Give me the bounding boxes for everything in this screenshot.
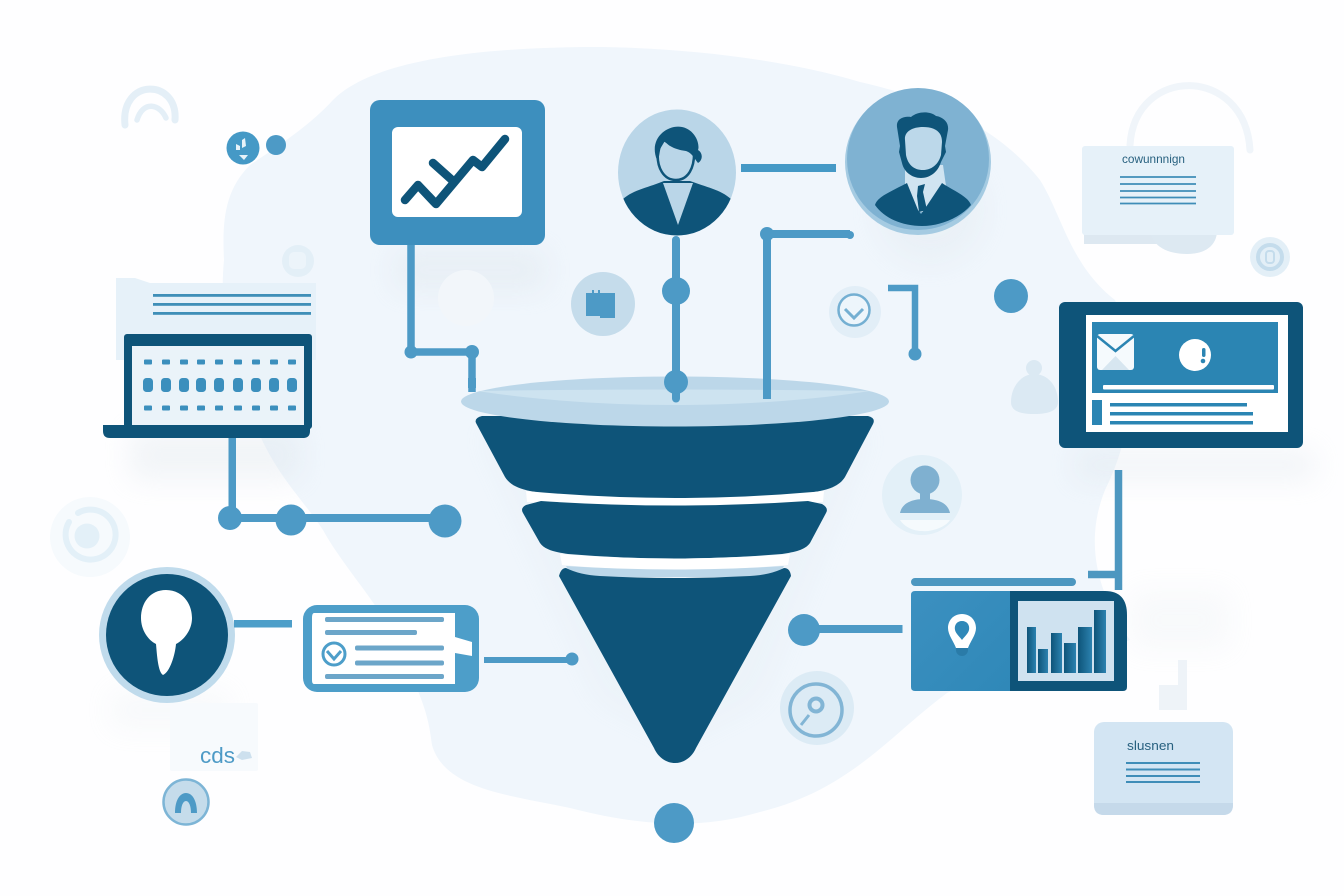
panel: analytics card bbox=[911, 578, 1127, 691]
chart trend line bbox=[405, 139, 505, 204]
faint bracket icon bbox=[1159, 660, 1187, 710]
checklist lines bbox=[325, 617, 444, 679]
paper lines bbox=[153, 294, 311, 315]
connector: checklist to dot bbox=[484, 652, 578, 666]
connector: L to funnel bbox=[760, 227, 854, 399]
cds label: cds bbox=[200, 743, 235, 768]
connector stubs over rim bbox=[468, 370, 771, 402]
node dot right bbox=[994, 279, 1028, 313]
panel: checklist card bbox=[303, 605, 479, 692]
white gap 2 bbox=[560, 554, 790, 570]
decorative arc icon top left bbox=[125, 89, 175, 125]
icon: small at-badge bbox=[1250, 237, 1290, 277]
funnel tier 2 bbox=[522, 501, 827, 558]
keyboard dots bbox=[143, 360, 297, 410]
card: summary note bbox=[1094, 722, 1233, 815]
connector: laptop to nodes bbox=[218, 438, 462, 538]
person: man bbox=[845, 88, 991, 235]
paper back bbox=[116, 278, 316, 360]
faint circle bbox=[438, 270, 494, 326]
panel: email monitor bbox=[1059, 302, 1303, 448]
laptop bbox=[124, 334, 312, 429]
panel: funnel bbox=[461, 376, 889, 763]
icon: envelope bbox=[1097, 334, 1134, 370]
connector: node to analytics card bbox=[788, 614, 902, 646]
bar chart bbox=[1027, 610, 1106, 673]
background blob bbox=[223, 47, 1131, 824]
funnel rim bbox=[461, 376, 889, 426]
icon: thumbs badge bbox=[226, 132, 260, 164]
faint speech badge bbox=[282, 245, 314, 277]
icon: location bulb bbox=[948, 614, 976, 656]
card: campaign note bbox=[1082, 146, 1234, 254]
bottom node dot bbox=[654, 803, 694, 843]
white gap 1 bbox=[526, 491, 824, 507]
card: cds bbox=[170, 703, 258, 771]
node dot top left bbox=[266, 135, 286, 155]
icon: user badge bbox=[882, 455, 962, 535]
icon: alert bbox=[1179, 339, 1211, 371]
light collar bbox=[566, 566, 784, 577]
faint bell icon bbox=[1011, 360, 1058, 414]
small bracket connector bbox=[888, 288, 922, 360]
card label: cowunnnign bbox=[1122, 152, 1185, 166]
soft shadows bbox=[110, 155, 1315, 740]
rim inner bbox=[477, 390, 870, 405]
connector: monitor to analytics card bbox=[1088, 470, 1122, 590]
card text lines bbox=[1120, 177, 1196, 204]
icon: arch badge bbox=[164, 780, 208, 824]
icon: check bbox=[323, 643, 345, 665]
funnel tier 1 bbox=[476, 416, 874, 499]
icon: search disc bbox=[780, 671, 854, 745]
panel: notes and laptop bbox=[103, 278, 316, 438]
person: woman bbox=[618, 110, 736, 240]
icon: check badge bbox=[829, 286, 881, 338]
icon: calendar badge bbox=[571, 272, 635, 336]
icon: pin avatar bbox=[99, 567, 235, 703]
funnel tier 3 bbox=[559, 568, 791, 763]
faint ring icon bbox=[50, 497, 130, 577]
connector: avatar to checklist bbox=[234, 620, 292, 628]
panel: chart card bbox=[370, 100, 545, 245]
connector between people bbox=[741, 164, 836, 172]
connector: woman to funnel bbox=[662, 236, 690, 402]
card label: slusnen bbox=[1127, 739, 1174, 753]
connector: chart card to funnel bbox=[404, 245, 479, 392]
card text lines bbox=[1126, 762, 1200, 783]
decorative arc top right bbox=[1130, 86, 1250, 150]
